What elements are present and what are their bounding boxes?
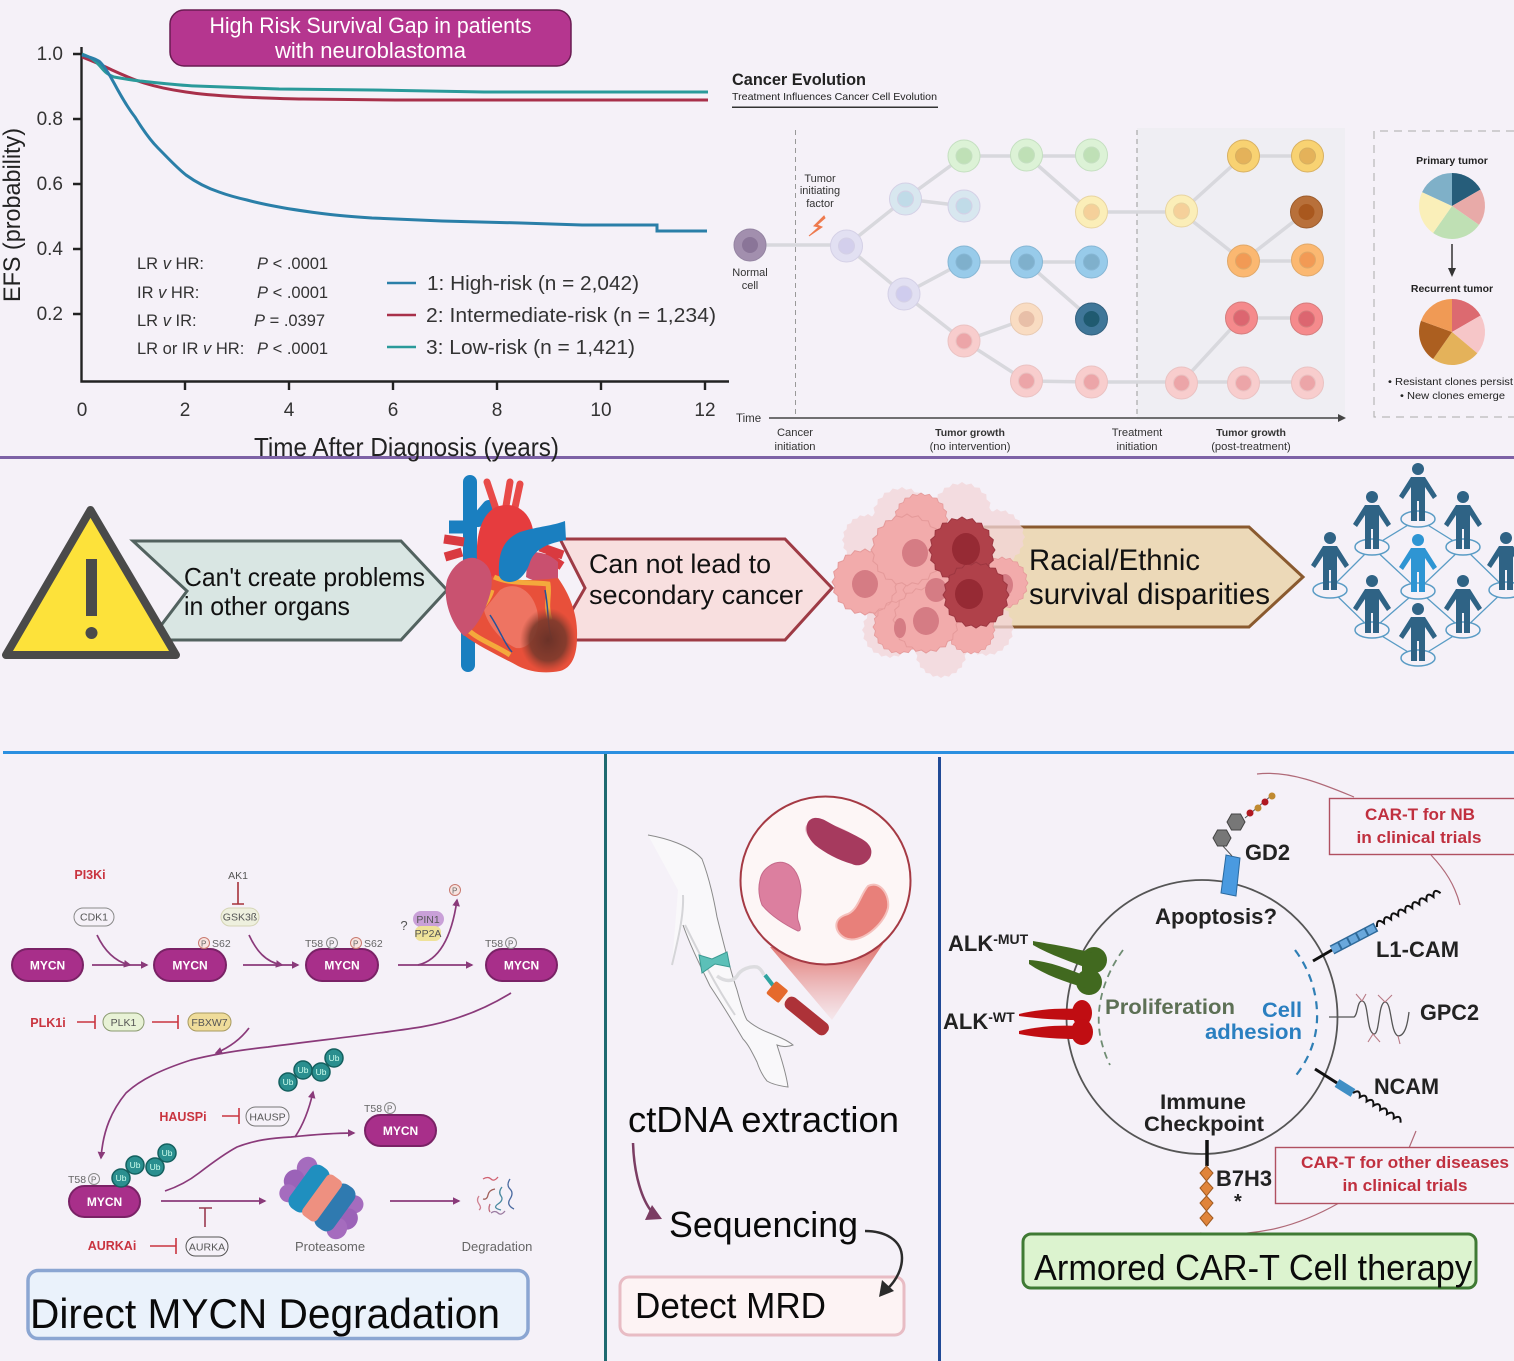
p value table: LR v IR: <box>137 312 197 330</box>
inhibitor drug labels: PI3Ki <box>74 868 106 882</box>
cell circle <box>1066 880 1338 1154</box>
necrotic patch <box>520 608 576 672</box>
text: ctDNA extraction: ctDNA extraction <box>628 1099 899 1140</box>
section divider: purple <box>0 456 1514 459</box>
label: B7H3: * <box>1234 1191 1242 1213</box>
phosphorylation marks: P <box>329 940 334 948</box>
cell: brown <box>1290 196 1322 228</box>
curve: low-risk <box>82 54 708 92</box>
receptor: GPC2 <box>1329 994 1409 1044</box>
protein pills: PLK1 <box>111 1017 137 1029</box>
label: cell adhesion: Cell <box>1262 999 1302 1022</box>
section divider: blue <box>3 751 1514 754</box>
lineage connections <box>750 155 1307 383</box>
timeline labels: Treatment <box>1112 427 1163 439</box>
y axis tick labels: 0.2 <box>37 304 63 325</box>
arrow callout: racial disparities: survival disparities <box>1029 578 1270 611</box>
arm outline <box>648 835 793 1087</box>
person centre highlighted <box>1399 534 1437 592</box>
protein pills <box>74 908 444 1256</box>
timeline labels: (no intervention) <box>930 441 1011 453</box>
coronary fat <box>466 577 550 655</box>
label: proteasome: Proteasome <box>295 1239 365 1254</box>
person lower right <box>1444 575 1482 633</box>
MYCN pill labels: MYCN <box>324 958 360 972</box>
p value table: LR or IR v HR: <box>137 340 244 358</box>
protein pills: GSK3ß <box>223 912 257 924</box>
arrow callout: organs <box>133 541 447 640</box>
arrow: to sequencing <box>633 1143 662 1220</box>
label: GPC2: GPC2 <box>1420 1000 1479 1025</box>
legend: 1: High-risk (n = 2,042) <box>427 273 639 295</box>
phosphorylation marks: S62 <box>212 938 231 950</box>
label: tumor initiating factor <box>800 173 840 210</box>
label: ALK-MUT: ALK <box>948 931 993 956</box>
right atrium <box>446 558 492 636</box>
label: ALK-WT: ALK <box>943 1009 988 1034</box>
heading: cancer evolution: Treatment Influences Cancer Cell Evolution <box>732 91 937 103</box>
person left <box>1311 532 1349 590</box>
curve: intermediate-risk <box>82 57 708 100</box>
icon: heart <box>444 482 577 672</box>
pathway arrows <box>92 900 511 1201</box>
ubiquitin chain upper: Ub <box>316 1067 327 1077</box>
protein pills: PP2A <box>415 928 441 940</box>
cell: normal <box>734 229 766 261</box>
phosphorylation marks: P <box>387 1104 392 1114</box>
blood tubing <box>717 967 764 980</box>
timeline labels: initiation <box>1116 441 1158 453</box>
pie: recurrent tumor <box>1419 299 1485 365</box>
thin connector curves <box>1200 773 1460 1234</box>
y axis tick labels: 0.6 <box>37 174 63 195</box>
phosphorylation marks: P <box>508 940 513 948</box>
panel: MYCN degradation pathway <box>12 868 557 1256</box>
MYCN pill labels: MYCN <box>383 1124 418 1138</box>
label: primary tumor: Primary tumor <box>1416 155 1488 167</box>
ubiquitin chain upper: Ub <box>329 1053 340 1063</box>
arrow callout: secondary cancer: secondary cancer <box>589 580 803 610</box>
dark cell nuclei <box>952 533 983 609</box>
note: clone evolution: • Resistant clones persist <box>1388 376 1513 388</box>
label: recurrent tumor: Recurrent tumor <box>1411 283 1493 295</box>
title banner: High Risk Survival Gap in patients <box>210 13 532 38</box>
cells: green <box>948 139 1108 172</box>
box: armored CAR-T heading: Armored CAR-T Cell therapy <box>1034 1247 1472 1288</box>
p value table: P < .0001 <box>257 284 328 302</box>
legend: 3: Low-risk (n = 1,421) <box>426 337 635 359</box>
x axis tick labels <box>77 400 716 421</box>
timeline labels <box>774 427 1291 453</box>
network links <box>1330 519 1506 658</box>
arrow callout: organs: in other organs <box>184 591 350 621</box>
p value table: P = .0397 <box>254 312 325 330</box>
label: B7H3: B7H3 <box>1216 1166 1272 1191</box>
timeline labels: initiation <box>774 441 816 453</box>
y axis tick labels: 0.8 <box>37 109 63 130</box>
arm fill <box>648 835 793 1087</box>
box: CAR-T for other diseases: CAR-T for other diseases <box>1301 1153 1509 1172</box>
ubiquitin chain lower <box>112 1144 176 1187</box>
label: L1-CAM: L1-CAM <box>1376 937 1459 962</box>
label: normal cell <box>732 267 768 292</box>
ubiquitin chain lower: Ub <box>150 1162 161 1172</box>
label: cell adhesion <box>1205 999 1302 1044</box>
arrow: to detect MRD <box>865 1231 902 1297</box>
label: immune checkpoint: Checkpoint <box>1144 1113 1264 1136</box>
ventricle body <box>460 576 577 672</box>
label: tumor initiating factor: factor <box>806 198 834 210</box>
arrow callout: secondary cancer: Can not lead to <box>589 549 771 579</box>
box: CAR-T for other diseases <box>1276 1148 1514 1204</box>
magnifier circle <box>740 796 910 964</box>
curve: high-risk <box>82 55 707 231</box>
icon: proteasome <box>271 1151 373 1245</box>
phosphorylation marks: T58 <box>68 1174 86 1186</box>
MYCN pills <box>12 949 557 1217</box>
text: sequencing: Sequencing <box>669 1204 858 1245</box>
person right <box>1487 532 1514 590</box>
label: NCAM: NCAM <box>1374 1074 1439 1099</box>
MYCN pill labels: MYCN <box>87 1195 122 1209</box>
x axis tick labels: 4 <box>284 400 295 421</box>
person upper right <box>1444 491 1482 549</box>
inhibitor drug labels: HAUSPi <box>159 1110 207 1124</box>
p value table <box>137 255 328 358</box>
protein pills: FBXW7 <box>191 1017 228 1029</box>
protein pills: PIN1 <box>416 914 440 926</box>
MYCN pill labels <box>30 958 539 1209</box>
x axis title: Time After Diagnosis (years) <box>254 432 559 462</box>
cells: orange <box>1228 244 1324 277</box>
box: detect MRD <box>620 1277 904 1335</box>
great vessels <box>468 482 489 665</box>
cells: gold <box>1228 140 1324 172</box>
x axis tick labels: 8 <box>492 400 502 421</box>
label: immune checkpoint: Immune <box>1160 1091 1246 1114</box>
note: clone evolution: • New clones emerge <box>1400 390 1505 402</box>
phosphorylation marks: P <box>353 940 358 948</box>
MYCN pill labels: MYCN <box>30 958 65 972</box>
x axis tick labels: 2 <box>180 400 190 421</box>
coronary vessels <box>490 590 552 652</box>
ubiquitin chain upper: Ub <box>283 1077 294 1087</box>
label: degradation: Degradation <box>462 1239 532 1254</box>
x axis tick labels: 0 <box>77 400 87 421</box>
protein pills: ? <box>400 918 408 933</box>
dashed arc: cell adhesion <box>1293 950 1317 1079</box>
inhibitor drug labels: PLK1i <box>30 1016 66 1030</box>
dashed timeline markers <box>796 130 1137 415</box>
receptor: L1-CAM <box>1313 889 1441 961</box>
label: proliferation: Proliferation <box>1105 996 1235 1019</box>
p value table: P < .0001 <box>257 255 328 273</box>
inhibitor drug labels: AURKAi <box>88 1239 136 1253</box>
phosphorylation marks: P <box>452 886 457 896</box>
vertical divider: teal <box>604 754 607 1361</box>
label: ALK-MUT: -MUT <box>993 931 1029 947</box>
receptor: ALK wild type <box>1019 1000 1093 1045</box>
timeline labels: Tumor growth <box>1216 427 1286 439</box>
heading: cancer evolution <box>732 70 938 108</box>
cells: yellow <box>1076 195 1198 228</box>
phosphorylation marks: T58 <box>364 1103 382 1115</box>
cells: lavender and pale blue <box>830 183 980 310</box>
receptor: B7H3 <box>1200 1140 1213 1226</box>
legend <box>387 273 716 359</box>
timeline labels: (post-treatment) <box>1211 441 1291 453</box>
needle adapter <box>765 975 775 988</box>
person bottom <box>1399 603 1437 661</box>
arrow callout: organs: Can't create problems <box>184 562 425 592</box>
panel: ctDNA liquid biopsy <box>620 796 910 1335</box>
magnifier cone <box>770 944 883 1020</box>
ctDNA fragment: coral <box>836 885 888 939</box>
panel: survival chart <box>0 44 729 462</box>
MYCN pill labels: MYCN <box>172 958 208 972</box>
panel: CAR-T targets <box>943 773 1514 1288</box>
receptor: NCAM <box>1315 1069 1403 1123</box>
icon: blood tube <box>766 981 832 1039</box>
pink tumor cells <box>832 493 1028 654</box>
icon: arm with blood draw <box>648 835 793 1087</box>
icon: people network <box>1311 463 1514 666</box>
icon: lightning bolt <box>809 216 825 236</box>
arrow: primary to recurrent <box>1448 244 1456 277</box>
pie: primary tumor <box>1419 173 1485 239</box>
faded outer cells <box>842 482 1025 678</box>
title banner: with neuroblastoma <box>274 38 467 63</box>
aorta <box>477 505 533 585</box>
person upper left <box>1353 491 1391 549</box>
label: normal cell: cell <box>742 280 758 292</box>
AKT label: AK1 <box>228 870 248 882</box>
timeline labels: Cancer <box>777 427 813 439</box>
network nodes <box>1313 511 1514 666</box>
icon: degraded peptides <box>478 1177 514 1214</box>
heading: cancer evolution: Cancer Evolution <box>732 70 866 89</box>
x axis tick labels: 6 <box>388 400 398 421</box>
ubiquitin chain lower: Ub <box>162 1148 173 1158</box>
left atrium <box>526 552 558 582</box>
time arrow <box>736 413 1346 425</box>
post-treatment shaded area <box>1137 128 1345 420</box>
phosphorylation marks: S62 <box>364 938 383 950</box>
protein pills: AURKA <box>189 1242 225 1254</box>
MYCN pill labels: MYCN <box>504 958 539 972</box>
dark tumor cells <box>929 517 1009 628</box>
heading box: direct MYCN degradation: Direct MYCN Degradation <box>30 1290 500 1337</box>
panel: cancer evolution <box>732 70 1514 453</box>
box: CAR-T for NB <box>1330 798 1514 854</box>
label: normal cell: Normal <box>732 267 768 279</box>
cells: blue <box>948 246 1108 278</box>
timeline labels: Tumor growth <box>935 427 1005 439</box>
ubiquitin chain upper: Ub <box>298 1065 309 1075</box>
p value table: P < .0001 <box>257 340 328 358</box>
vertical divider: navy <box>938 757 941 1361</box>
label: GD2: GD2 <box>1245 840 1290 865</box>
ubiquitin chain lower: Ub <box>116 1173 127 1183</box>
box: CAR-T for NB: CAR-T for NB <box>1365 805 1475 824</box>
cells: red <box>1226 302 1322 335</box>
arrow callout: racial disparities <box>985 527 1303 627</box>
p value table: IR v HR: <box>137 284 199 302</box>
y axis tick labels <box>37 44 63 325</box>
box: detect MRD: Detect MRD <box>635 1285 826 1326</box>
title banner <box>170 10 571 66</box>
ctDNA fragment: pink <box>759 862 801 931</box>
icon: tumor cell cluster <box>832 482 1028 678</box>
x axis tick labels: 12 <box>694 400 716 421</box>
phosphorylation marks: T58 <box>305 938 323 950</box>
phosphorylation marks: P <box>91 1176 96 1184</box>
phosphorylation marks: T58 <box>485 938 503 950</box>
legend: 2: Intermediate-risk (n = 1,234) <box>426 305 716 327</box>
ventricle lighter inner <box>484 586 538 648</box>
dashed box: tumor comparison <box>1374 131 1514 417</box>
tourniquet <box>699 952 730 973</box>
heading box: direct MYCN degradation <box>28 1270 528 1338</box>
receptor: ALK mutant <box>1029 941 1107 995</box>
person top <box>1399 463 1437 521</box>
phosphorylation marks: P <box>201 940 206 948</box>
label: ALK-WT: -WT <box>988 1009 1015 1025</box>
label: tumor initiating factor: Tumor <box>804 173 836 185</box>
person lower left <box>1353 575 1391 633</box>
box: CAR-T for NB: in clinical trials <box>1356 828 1482 847</box>
inhibition bars <box>77 882 244 1254</box>
cell: peach <box>1010 303 1042 335</box>
label: immune checkpoint <box>1144 1091 1264 1136</box>
cell nuclei <box>852 539 1013 638</box>
label: cell adhesion: adhesion <box>1205 1021 1302 1044</box>
ubiquitin chain upper <box>279 1049 343 1091</box>
phosphorylation marks <box>68 884 516 1186</box>
ctDNA fragment: dark <box>800 814 876 870</box>
label: apoptosis: Apoptosis? <box>1155 904 1277 929</box>
time arrow: Time <box>736 413 761 425</box>
y axis tick labels: 1.0 <box>37 44 63 65</box>
arrow callout: racial disparities: Racial/Ethnic <box>1029 544 1200 577</box>
note: clone evolution <box>1388 376 1513 402</box>
protein pills: CDK1 <box>80 912 108 924</box>
arm shading <box>672 895 735 1015</box>
dashed arc: proliferation <box>1099 950 1123 1065</box>
arrow callout: secondary cancer <box>555 539 832 640</box>
ubiquitin chain lower: Ub <box>130 1160 141 1170</box>
GD2 glycolipid <box>1213 792 1276 896</box>
inhibitor drug labels <box>30 868 207 1253</box>
label: B7H3 <box>1216 1166 1272 1213</box>
protein pills: HAUSP <box>249 1112 286 1124</box>
box: CAR-T for other diseases: in clinical trials <box>1342 1176 1468 1195</box>
cell: dark blue <box>1076 303 1108 335</box>
chart axes <box>73 47 729 390</box>
cells: pink <box>948 325 1324 399</box>
icon: warning triangle <box>6 510 176 655</box>
p value table: LR v HR: <box>137 255 204 273</box>
pulmonary artery <box>499 521 566 582</box>
y axis tick labels: 0.4 <box>37 239 63 260</box>
x axis tick labels: 10 <box>590 400 612 421</box>
label: tumor initiating factor: initiating <box>800 185 840 197</box>
